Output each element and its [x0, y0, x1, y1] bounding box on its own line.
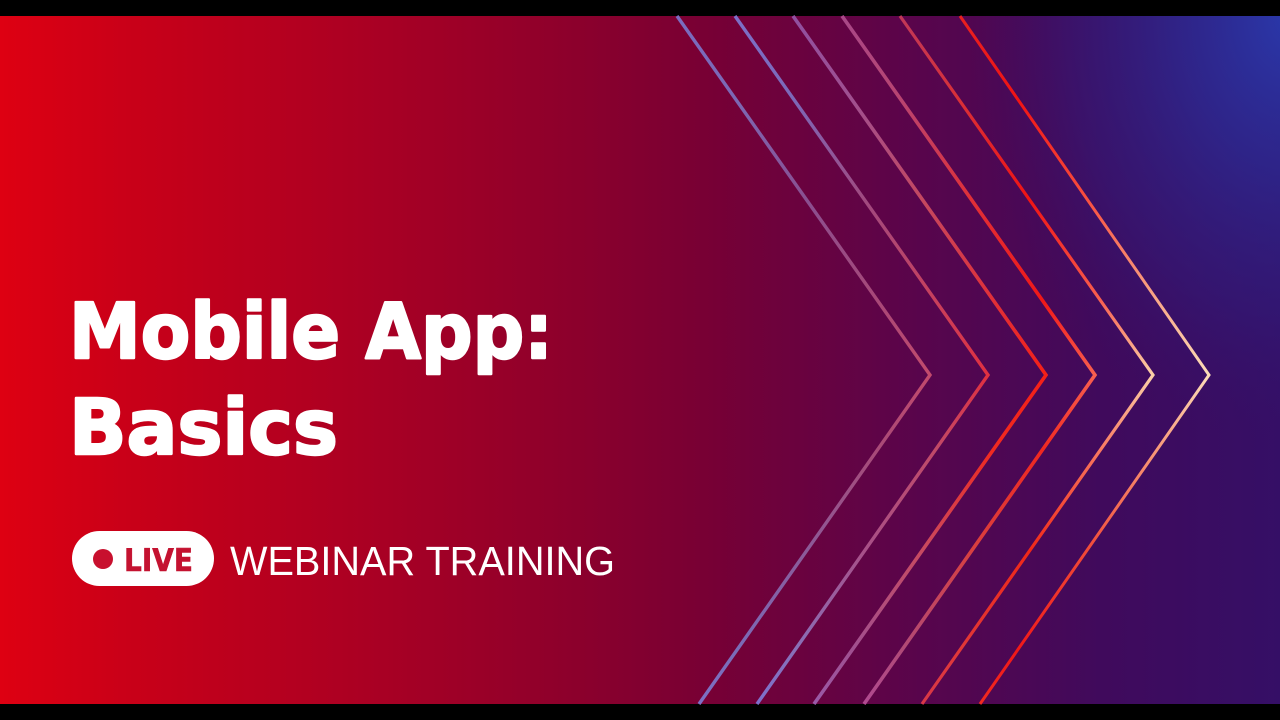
title: Basics	[69, 384, 338, 473]
live badge	[72, 531, 214, 586]
title	[69, 288, 553, 473]
subtitle: WEBINAR TRAINING	[230, 538, 615, 584]
chevron line art	[677, 16, 1209, 704]
title: Mobile App:	[69, 288, 553, 377]
live badge: LIVE	[124, 543, 193, 579]
